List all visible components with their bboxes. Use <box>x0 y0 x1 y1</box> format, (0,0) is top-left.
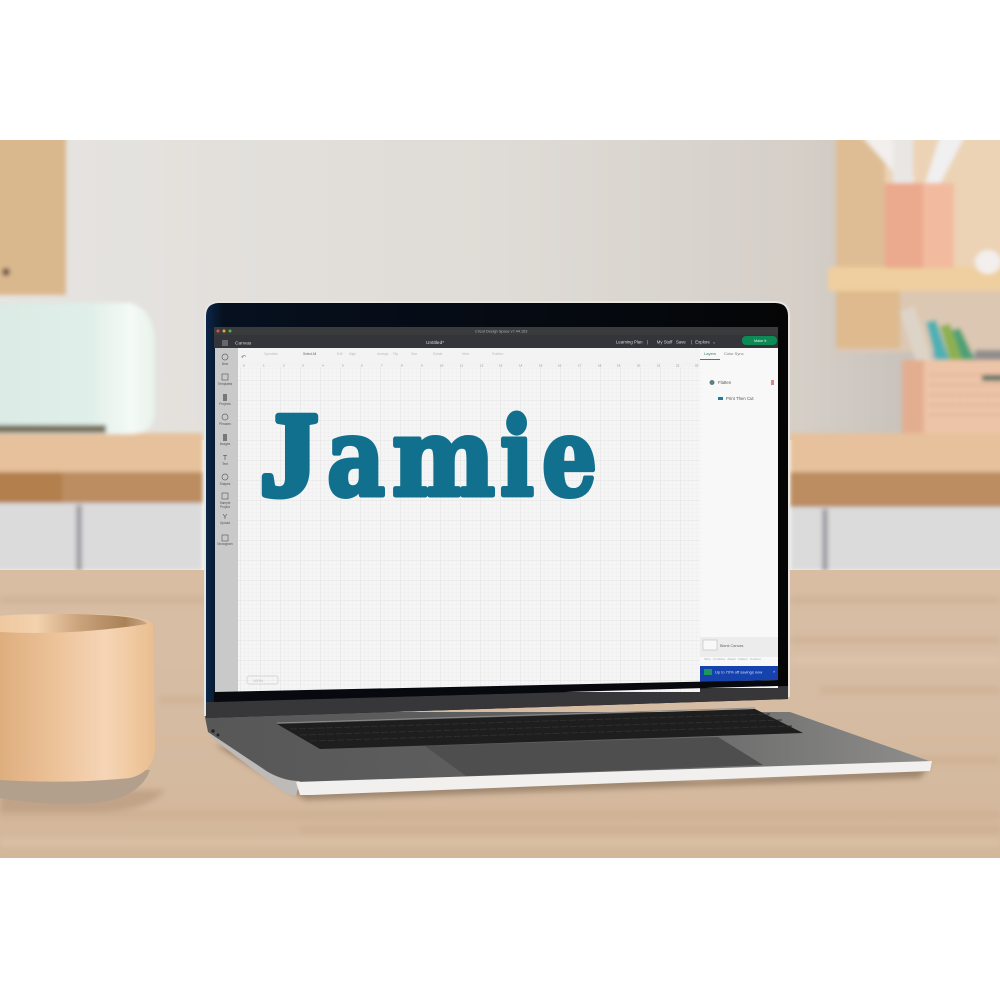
ruler: 13 <box>499 364 503 368</box>
ruler: 12 <box>480 364 484 368</box>
ruler: 5 <box>342 364 344 368</box>
ruler: 3 <box>302 364 304 368</box>
ruler: 2 <box>283 364 285 368</box>
counter top <box>0 433 1000 472</box>
ruler: 10 <box>440 364 444 368</box>
ruler: 14 <box>519 364 523 368</box>
hinge strip <box>206 686 788 718</box>
ruler: 16 <box>558 364 562 368</box>
ruler: 18 <box>598 364 602 368</box>
window buttons <box>216 330 232 332</box>
blank canvas row <box>700 637 778 657</box>
ruler: 15 <box>539 364 543 368</box>
menu icon <box>222 341 228 345</box>
mug body <box>0 614 155 782</box>
wooden desk <box>0 570 1000 858</box>
layers tabs: Layers <box>704 351 716 356</box>
left tool sidebar: Phrases <box>219 422 231 426</box>
cabinet fronts <box>0 503 203 571</box>
laptop front edge <box>296 761 932 795</box>
edit toolbar: Size <box>411 352 417 356</box>
Jamie design text: J <box>260 388 318 521</box>
pink pencil cup <box>856 130 1000 274</box>
left tool sidebar: Projects <box>219 402 231 406</box>
mug rim opening <box>0 614 147 633</box>
ruler: 21 <box>657 364 661 368</box>
ruler: 19 <box>617 364 621 368</box>
ruler <box>234 362 700 368</box>
edit toolbar: ↶ <box>241 354 246 361</box>
Jamie design text: i <box>500 395 534 521</box>
laptop shadow <box>215 745 930 800</box>
left tool sidebar: Text <box>222 462 228 466</box>
panel bottom icons: Slice Combine Attach Flatten Contour <box>704 657 761 661</box>
document title: Untitled* <box>426 340 444 346</box>
layers panel <box>700 348 778 688</box>
background wall <box>0 140 1000 440</box>
layers panel: Color Sync <box>724 351 744 356</box>
books <box>900 306 1000 362</box>
ruler: 17 <box>578 364 582 368</box>
edit toolbar: More <box>462 352 469 356</box>
left wooden cabinet <box>0 130 66 295</box>
background: shelves, machine and counter <box>0 130 1000 571</box>
ruler: 6 <box>361 364 363 368</box>
make it button <box>742 336 777 345</box>
ruler: 22 <box>676 364 680 368</box>
laptop <box>204 301 932 800</box>
left tool sidebar: Y <box>223 514 228 521</box>
canvas label: Canvas <box>235 340 252 346</box>
left tool sidebar: Project <box>220 505 230 509</box>
header links: Learning Plan | My Stuff Save | Explore ⌄ <box>616 340 716 344</box>
promo banner: ˄ <box>773 669 776 674</box>
zoom control: 100% <box>253 678 264 683</box>
edit toolbar: Operation <box>264 352 278 356</box>
ruler: 8 <box>401 364 403 368</box>
zoom control <box>247 676 278 684</box>
mint cutting machine <box>0 303 155 434</box>
left tool sidebar: Upload <box>220 521 230 525</box>
ruler: 11 <box>460 364 463 368</box>
layer row: Flatten <box>718 380 732 385</box>
edit toolbar: Flip <box>393 352 398 356</box>
layers panel: Blank Canvas <box>720 644 744 648</box>
edit toolbar: Align <box>349 352 356 356</box>
edit toolbar: Position <box>492 352 504 356</box>
Jamie design text: e <box>542 395 597 521</box>
ruler: 7 <box>381 364 383 368</box>
ruler: 23 <box>695 364 699 368</box>
left tool sidebar: T <box>223 455 228 462</box>
left tool sidebar: Sample <box>220 501 231 505</box>
left tool sidebar: Shapes <box>220 482 231 486</box>
lid black bezel <box>206 303 788 718</box>
ruler: 20 <box>637 364 641 368</box>
trackpad <box>425 737 763 776</box>
left tool sidebar: Templates <box>218 382 233 386</box>
keyboard <box>277 709 803 749</box>
ruler: 4 <box>322 364 324 368</box>
pink basket <box>902 360 1000 440</box>
Jamie design text: a <box>327 395 385 521</box>
app header bar <box>214 335 778 348</box>
promo banner <box>700 666 778 682</box>
screen title bar <box>214 327 778 335</box>
left tool sidebar: Images <box>220 442 231 446</box>
mug ceramic base <box>0 770 150 804</box>
laptop side edge <box>208 732 300 796</box>
app name in title bar: Cricut Design Space v7.44.163 <box>475 330 527 334</box>
ruler: 0 <box>243 364 245 368</box>
left tool sidebar <box>215 348 238 692</box>
edit toolbar: Edit <box>337 352 343 356</box>
left tool sidebar: New <box>222 362 229 366</box>
ruler: 1 <box>263 364 265 368</box>
make it button: Make It <box>754 339 767 343</box>
left tool sidebar: Monogram <box>217 542 233 546</box>
mug <box>0 614 165 812</box>
edit toolbar: Select All <box>303 352 316 356</box>
right wooden shelf unit <box>836 130 1000 268</box>
edit toolbar <box>215 348 700 362</box>
edit toolbar: Arrange <box>377 352 389 356</box>
print then cut row: Print Then Cut <box>726 396 754 401</box>
screen bottom edge <box>214 680 778 702</box>
edit toolbar: Rotate <box>433 352 443 356</box>
Jamie design text: m <box>392 395 495 521</box>
promo banner: Up to 70% off savings now <box>715 670 762 674</box>
mug shadow <box>0 790 165 812</box>
lid silver frame <box>204 301 790 716</box>
photo: laptop on a wooden desk <box>0 140 1000 858</box>
canvas grid <box>238 362 700 692</box>
ports <box>211 729 215 733</box>
ruler: 9 <box>421 364 423 368</box>
laptop base deck <box>204 712 932 782</box>
